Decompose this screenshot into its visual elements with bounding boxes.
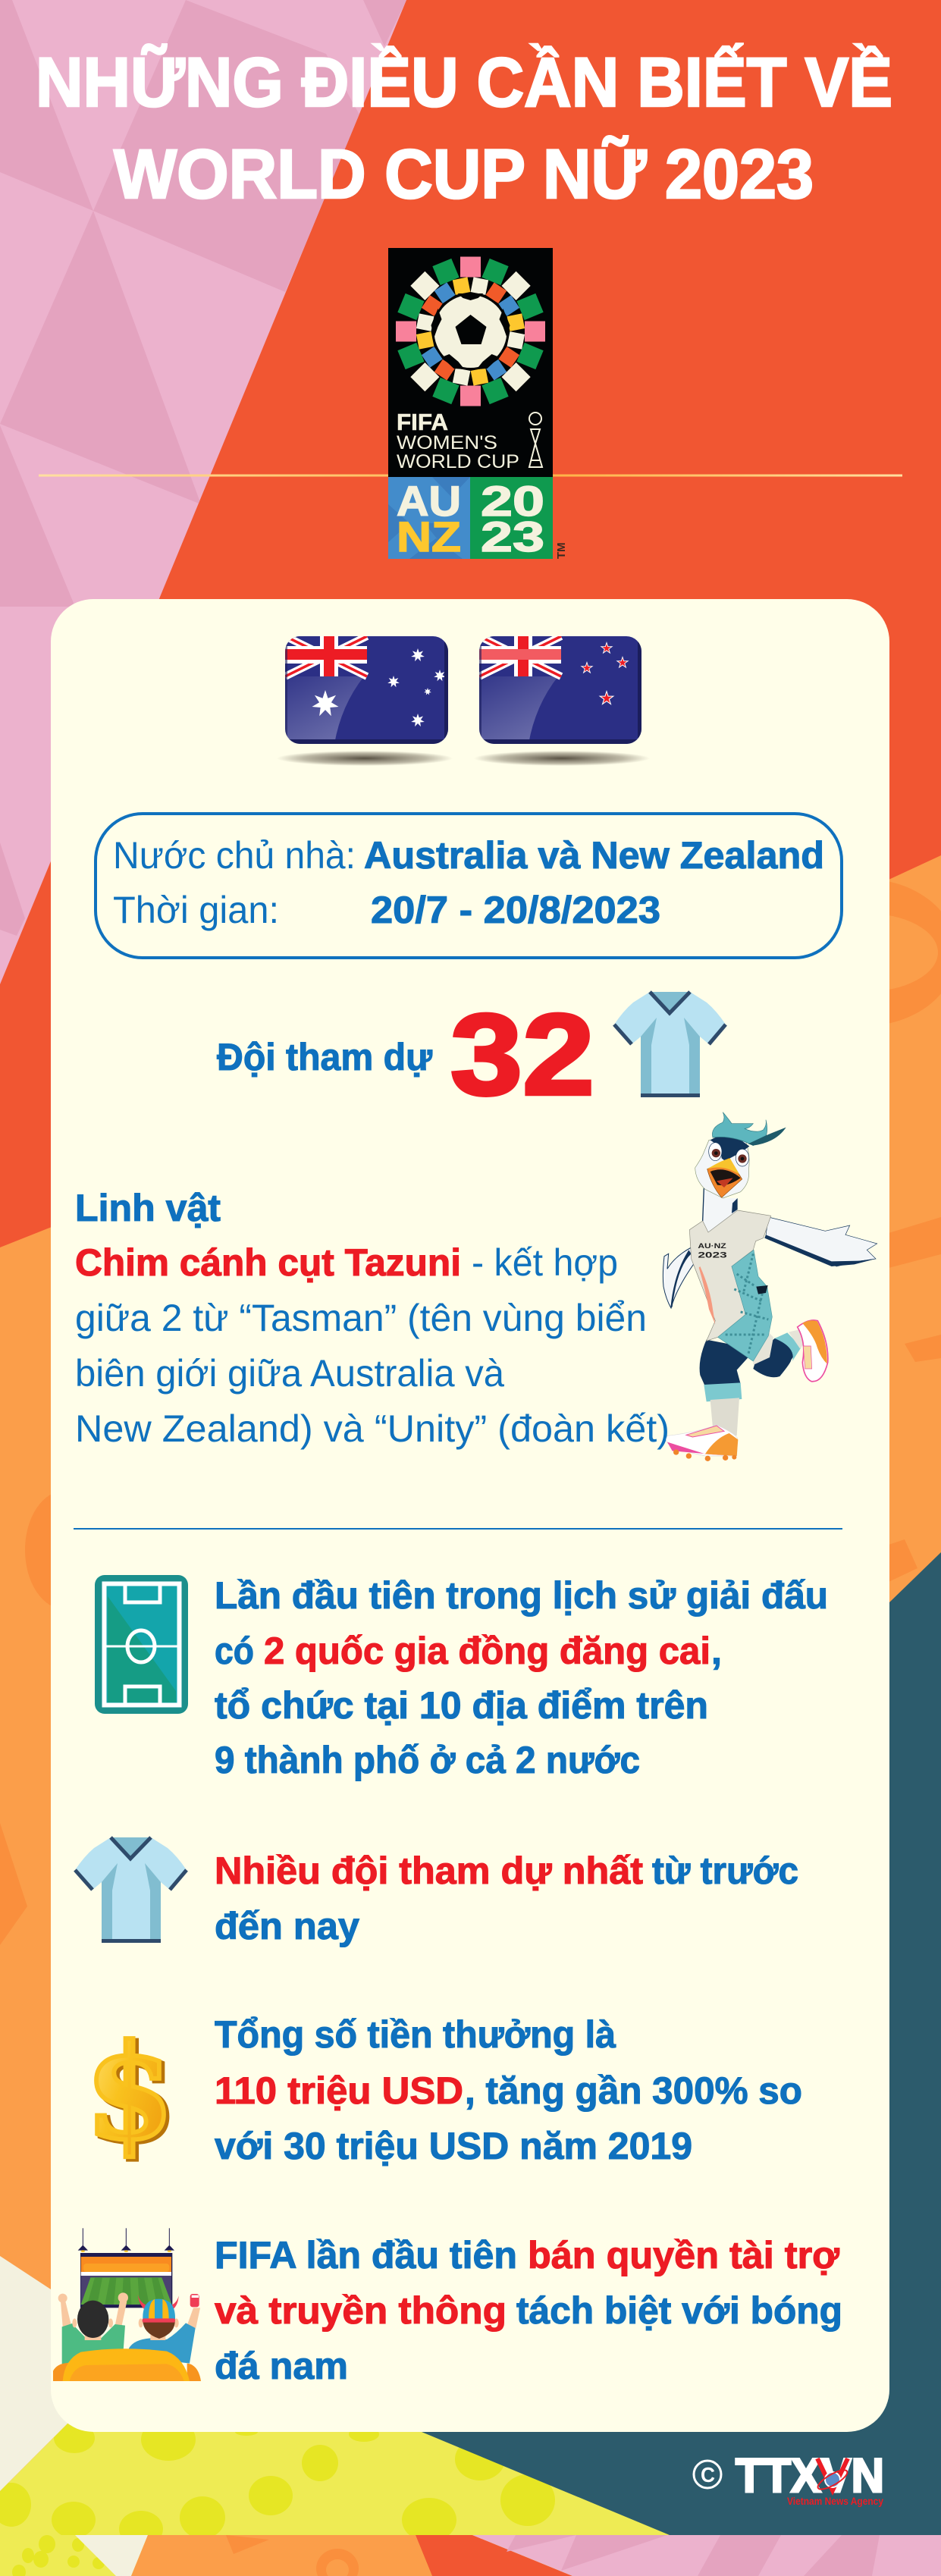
- title: [36, 43, 892, 213]
- logo: trademark: TM: [555, 542, 568, 559]
- title: WORLD CUP NỮ 2023: [114, 135, 814, 213]
- logo: TTXVN credit: TTXVN: [736, 2449, 884, 2502]
- text block: mascot: Linh vật: [75, 1187, 221, 1229]
- text block: most teams: đến nay: [215, 1905, 359, 1947]
- title: NHỮNG ĐIỀU CẦN BIẾT VỀ: [36, 43, 892, 121]
- logo: 2023 panel: [470, 477, 553, 560]
- text block: separate rights: FIFA lần đầu tiên: [215, 2234, 517, 2276]
- icon: gold dollar sign: $: [88, 2017, 177, 2171]
- flag: Australia: [277, 636, 453, 766]
- background: bottom strip: [0, 2535, 941, 2576]
- logo: AU NZ panel: [388, 477, 470, 560]
- couch: [53, 2363, 68, 2381]
- logo: FIFA Women's World Cup 2023: [388, 248, 568, 560]
- icon: fans watching TV: [53, 2228, 201, 2381]
- shirt text: AU·NZ: [698, 1242, 726, 1250]
- panel: host and dates box: 20/7 - 20/8/2023: [371, 889, 660, 931]
- beak: [707, 1158, 742, 1197]
- logo: wordmark: FIFA: [397, 409, 448, 435]
- text block: most teams: Nhiều đội tham dự nhất: [215, 1850, 643, 1892]
- logo: trophy: [529, 413, 542, 467]
- text block: mascot: [75, 1187, 670, 1450]
- patterned panel: [718, 1250, 772, 1361]
- text block: prize money: , tăng gần 300% so: [465, 2069, 802, 2112]
- text block: mascot: giữa 2 từ “Tasman” (tên vùng biển: [75, 1297, 647, 1339]
- logo: AU NZ panel: NZ: [397, 513, 461, 560]
- panel: host and dates box: Nước chủ nhà:: [113, 834, 356, 877]
- logo: TTXVN credit: Vietnam News Agency: [787, 2495, 883, 2507]
- text block: mascot: New Zealand) và “Unity” (đoàn kết): [75, 1407, 670, 1450]
- neck: [703, 1188, 738, 1232]
- text block: first time two hosts: 2 quốc gia đồng đăng cai: [264, 1630, 710, 1672]
- header divider line: [39, 475, 902, 476]
- logo: 2023 panel: 20: [481, 477, 544, 525]
- text block: separate rights: bán quyền tài trợ: [528, 2234, 839, 2276]
- text block: separate rights: tách biệt với bóng: [516, 2289, 842, 2332]
- text block: separate rights: đá nam: [215, 2345, 348, 2387]
- text block: first time two hosts: tổ chức tại 10 địa điểm trên: [215, 1684, 708, 1727]
- icon: gold dollar sign: $: [85, 2015, 174, 2169]
- stat: teams: Đội tham dự: [217, 1036, 433, 1078]
- text block: most teams: [215, 1850, 798, 1947]
- logo: wordmark: WORLD CUP: [397, 451, 519, 472]
- background: dark teal area: [422, 1552, 941, 2535]
- background: orange area: [0, 855, 941, 2351]
- text block: first time two hosts: ,: [711, 1630, 722, 1672]
- icon: mascot Tazuni: [663, 1112, 877, 1461]
- icon: jersey: [75, 1837, 187, 1943]
- text block: mascot: - kết hợp: [472, 1241, 618, 1284]
- left arm: [663, 1247, 694, 1308]
- far leg: [753, 1333, 800, 1377]
- logo: 2023 panel: 23: [481, 513, 544, 560]
- shirt: [689, 1210, 771, 1341]
- text block: first time two hosts: Lần đầu tiên trong lịch sử giải đấu: [215, 1574, 828, 1617]
- logo: wordmark: WOMEN'S: [397, 432, 497, 453]
- right arm: [766, 1217, 877, 1266]
- flag: New Zealand: [474, 636, 650, 766]
- text block: first time two hosts: [215, 1574, 828, 1781]
- background: pink triangle pattern: [0, 0, 409, 986]
- panel: host and dates box: Thời gian:: [113, 889, 279, 931]
- logo: TTXVN credit: [694, 2449, 884, 2507]
- text block: first time two hosts: 9 thành phố ở cả 2 nước: [215, 1739, 640, 1781]
- icon: jersey: [614, 992, 726, 1097]
- logo: TTXVN credit: C: [701, 2463, 715, 2487]
- logo: outer ring of tiles: [396, 256, 545, 406]
- text block: mascot: biên giới giữa Australia và: [75, 1352, 504, 1395]
- stat: teams: [217, 990, 594, 1119]
- head: [695, 1140, 749, 1198]
- divider: [74, 1528, 842, 1530]
- hair: [712, 1112, 767, 1146]
- eyes: [709, 1143, 722, 1161]
- text block: first time two hosts: có: [215, 1630, 254, 1672]
- shorts hem: [753, 1332, 773, 1365]
- right fan: [187, 2308, 200, 2328]
- logo: wordmark: [397, 409, 519, 472]
- shirt text: [698, 1242, 727, 1260]
- panel: main card: [51, 599, 889, 2432]
- text block: separate rights: và truyền thông: [215, 2289, 507, 2332]
- panel: host and dates box: Australia và New Zealand: [364, 834, 824, 877]
- shirt text: 2023: [698, 1250, 727, 1260]
- text block: prize money: Tổng số tiền thưởng là: [215, 2013, 616, 2056]
- panel: host and dates box: [96, 814, 842, 958]
- icon: football pitch: [95, 1575, 188, 1714]
- logo: AU NZ panel: AU: [397, 477, 461, 525]
- text block: prize money: [215, 2013, 802, 2167]
- left fan: [61, 2300, 71, 2327]
- text block: prize money: với 30 triệu USD năm 2019: [215, 2125, 692, 2167]
- text block: mascot: Chim cánh cụt Tazuni: [75, 1241, 461, 1284]
- background: yellow dotted area: [0, 2424, 669, 2535]
- text block: separate rights: [215, 2234, 842, 2387]
- front leg: [700, 1340, 748, 1386]
- boot: [666, 1425, 738, 1456]
- background: off-white wedge: [0, 2256, 68, 2491]
- stat: teams: 32: [450, 990, 594, 1119]
- text block: prize money: 110 triệu USD: [215, 2069, 463, 2112]
- text block: most teams: từ trước: [652, 1850, 798, 1892]
